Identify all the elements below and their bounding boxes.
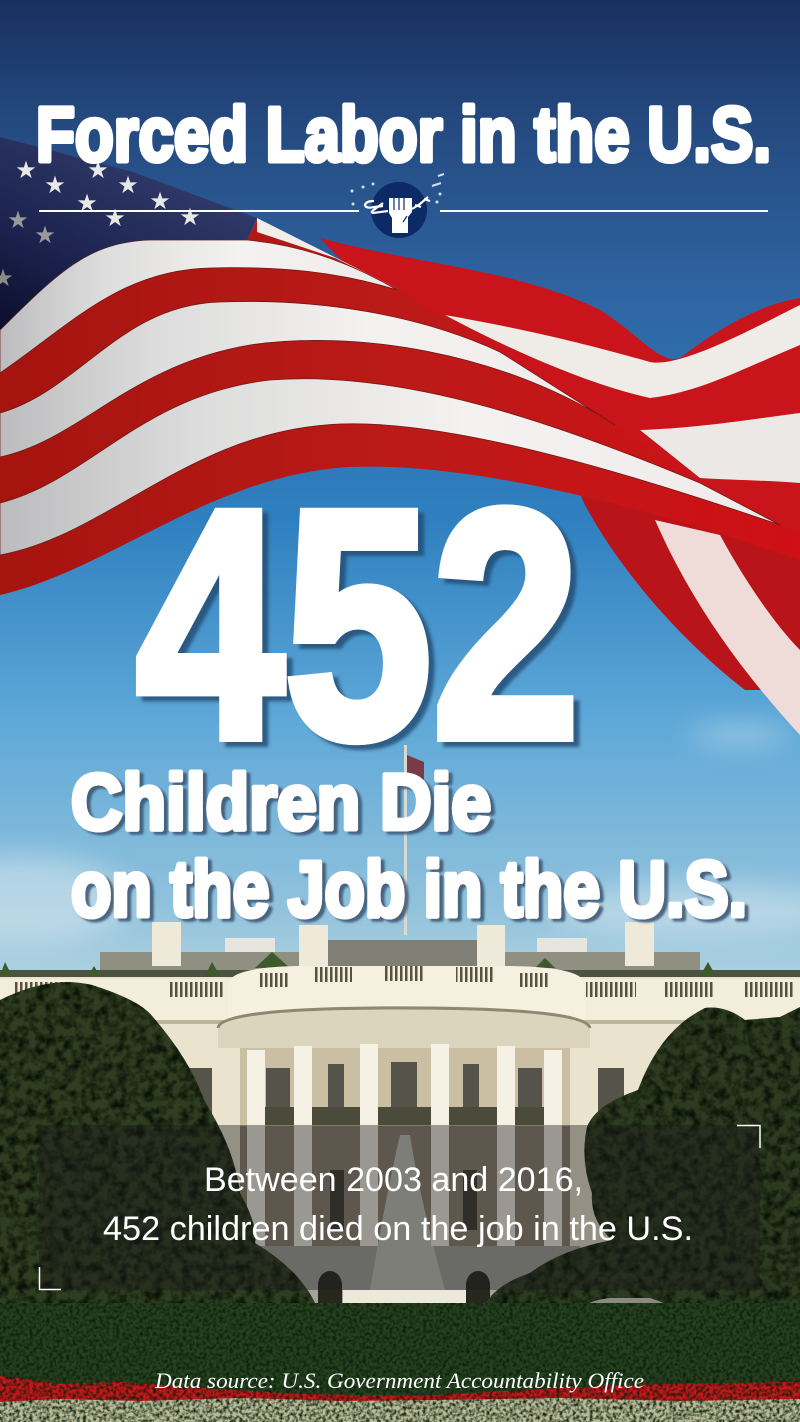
flag: hanging section [580,494,800,735]
parked car [585,1298,672,1307]
flag: red stripes [0,220,800,595]
flag: stars: ★ [76,190,98,217]
flag: stars: ★ [87,157,109,184]
arches [318,1271,490,1304]
flower bed: red [0,1376,800,1405]
tree: left [0,982,316,1305]
divider right [440,210,768,212]
illustration: White House [0,745,800,1308]
flag: canton [0,137,257,330]
clouds [0,725,800,945]
flag: stars: ★ [7,207,29,234]
flag: stars [0,157,201,292]
windows [186,1062,624,1230]
building facade [0,966,800,1307]
columns [247,1044,562,1246]
balustrades [14,966,795,997]
big number: 452 [136,443,580,807]
divider left [39,210,359,212]
flag: stars: ★ [34,222,56,249]
tree: right [485,1007,800,1308]
flag: stars: ★ [179,204,201,231]
headline [71,757,747,933]
flag: far section [320,238,800,560]
data source: Data source: U.S. Government Accountability Office [154,1368,644,1393]
flag: stars: ★ [149,188,171,215]
flagpole with small flag [404,745,424,935]
caption text [103,1161,693,1248]
flower bed: pale foliage [0,1398,800,1422]
flag: stars: ★ [117,172,139,199]
caption text: 452 children died on the job in the U.S. [103,1210,693,1248]
flag: white stripe top sliver [257,218,400,290]
roofline and chimneys [0,922,800,977]
icon: raised fist breaking chains [350,174,444,238]
flag: white stripe 2 [0,301,615,457]
flag: stars: ★ [104,205,126,232]
flag: stars: ★ [15,157,37,184]
hedge [0,1303,800,1395]
flag: white stripe 1 [0,240,397,373]
background: sky [0,0,800,1000]
flag: white stripe 3 [0,379,780,555]
caption frame corner: bottom left [40,1267,61,1290]
flag [0,137,800,735]
headline: Children Die [71,757,491,846]
flag: stars: ★ [44,172,66,199]
fountain [370,1135,445,1290]
panel: dark caption overlay [39,1125,760,1290]
caption text: Between 2003 and 2016, [204,1161,583,1199]
caption frame corner: top right [737,1126,760,1148]
